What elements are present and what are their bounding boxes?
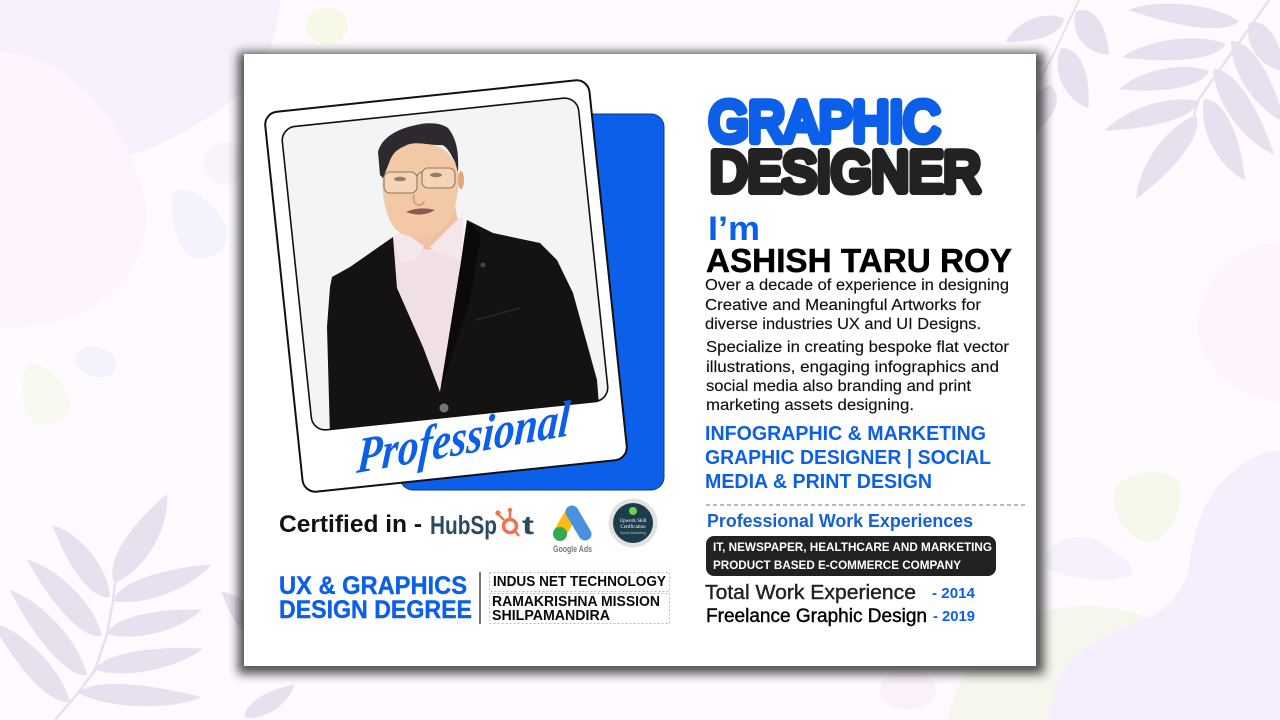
name heading: I’m [708,210,760,248]
degree heading: UX & GRAPHICS [279,572,467,600]
intro text: Over a decade of experience in designing [705,277,1009,294]
title: Graphic Designer: DESIGNER [710,140,981,204]
role heading: MEDIA & PRINT DESIGN [705,471,932,493]
industries badge: PRODUCT BASED E-COMMERCE COMPANY [713,560,961,572]
institutions: RAMAKRISHNA MISSION [492,593,660,610]
role heading: GRAPHIC DESIGNER | SOCIAL [705,447,991,469]
script caption: Professional [354,390,573,484]
name heading [706,210,1012,279]
total work experience row: Total Work Experience [705,582,916,604]
intro text: Creative and Meaningful Artworks for [705,297,982,314]
logo: HubSpot: HubSp [430,510,497,540]
intro text: diverse industries UX and UI Designs. [705,316,981,333]
divider [479,572,481,624]
shirt collar [396,220,458,249]
intro text [705,277,1010,414]
role heading: INFOGRAPHIC & MARKETING [705,423,986,445]
intro text: Specialize in creating bespoke flat vector [706,339,1010,356]
title: Graphic Designer [709,90,981,204]
logo: Google Ads: Google Ads [553,544,592,554]
jacket [327,220,599,436]
logo: Google Ads [553,512,592,554]
freelance row: - 2019 [933,609,975,625]
name heading: ASHISH TARU ROY [706,242,1012,279]
polaroid photo frame [264,79,628,493]
degree heading [279,572,472,624]
leaves: bottom left branch [0,488,301,720]
jacket pocket and pin [476,308,520,320]
industries badge [706,536,996,576]
jacket button [440,404,448,412]
institutions: SHILPAMANDIRA [492,607,610,624]
leaves: top right branches [1001,0,1280,205]
title: Graphic Designer: GRAPHIC [709,90,940,154]
intro text: social media also branding and print [706,378,972,395]
role heading [705,423,991,493]
work experience heading: Professional Work Experiences [707,511,973,531]
nose [414,195,424,205]
mouth [406,208,435,215]
intro text: marketing assets designing. [706,397,914,414]
hair [378,123,458,178]
blue backing panel [400,114,664,490]
institutions: INDUS NET TECHNOLOGY [493,573,666,590]
badge: Upwork skill certification: Social Marketing [620,531,646,535]
badge: Upwork skill certification [608,498,658,548]
certified in heading: Certified in - [279,511,422,538]
intro text: illustrations, engaging infographics and [706,359,999,376]
institutions [490,572,670,624]
eyes [394,177,406,181]
logo: HubSpot: t [522,510,534,540]
panel: white card [238,52,1044,674]
degree heading: DESIGN DEGREE [279,596,472,624]
portrait photo of man in black blazer [327,123,599,436]
badge: Upwork skill certification: Upwork Skill [619,519,647,524]
industries badge: IT, NEWSPAPER, HEALTHCARE AND MARKETING [713,542,992,554]
freelance row: Freelance Graphic Design [706,606,927,627]
total work experience row: - 2014 [932,586,975,602]
neck [398,205,458,250]
shirt [393,217,463,392]
glasses [384,168,455,193]
face [383,142,459,238]
badge: Upwork skill certification: Certification [620,525,646,530]
